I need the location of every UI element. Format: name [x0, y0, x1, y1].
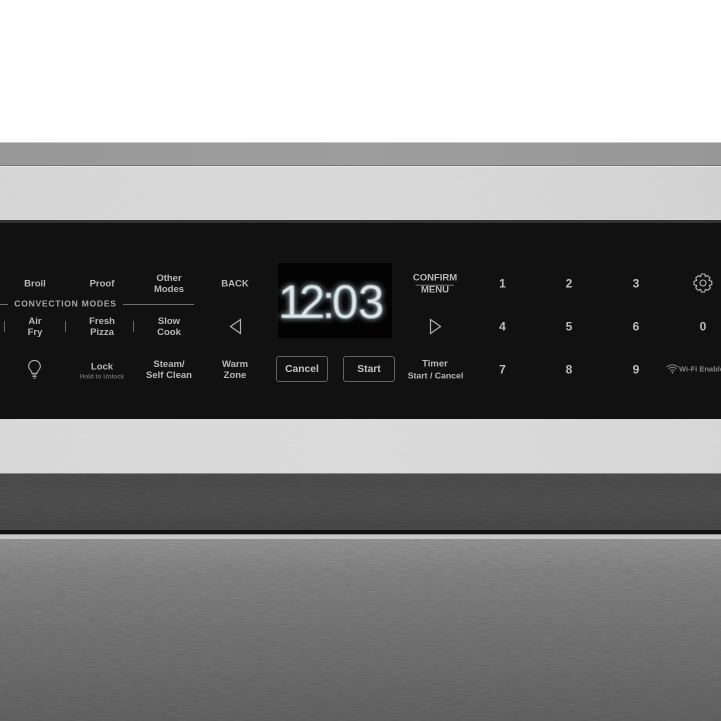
- dark steel strip: [0, 474, 721, 530]
- text: 7: [499, 362, 506, 376]
- label: Slow Cook: Cook: [157, 327, 181, 338]
- label: Steam / Self Clean: Self Clean: [146, 370, 192, 381]
- text: 8: [566, 362, 572, 376]
- label: Warm Zone: Zone: [224, 370, 246, 381]
- mode labels, first row: [24, 273, 249, 295]
- label: Proof: Proof: [90, 278, 114, 289]
- steel oven door: [0, 539, 721, 721]
- label: Other Modes: Other: [156, 273, 182, 284]
- display: clock: 12:03: [278, 275, 384, 328]
- icon: wifi: [666, 364, 678, 374]
- label: Air Fry: Fry: [28, 327, 42, 338]
- label: Slow Cook: [157, 316, 181, 338]
- icon: right arrow: [430, 318, 442, 334]
- door handle highlight: [0, 534, 721, 539]
- label: Broil: Broil: [24, 278, 46, 289]
- number keypad: [499, 276, 706, 376]
- icon: left arrow: [230, 318, 242, 334]
- mode labels, second row: [4, 316, 181, 338]
- button: Start: Start: [357, 364, 381, 375]
- label: Slow Cook: Slow: [158, 316, 180, 327]
- label: Fresh Pizza: Pizza: [90, 327, 114, 338]
- label: Warm Zone: Warm: [222, 359, 248, 370]
- display: clock: [278, 263, 392, 338]
- text: 3: [633, 276, 639, 290]
- door gap: [0, 530, 721, 534]
- text: 0: [700, 320, 706, 334]
- display: clock: 12:03: [278, 275, 384, 328]
- text: 2: [566, 276, 572, 290]
- label: Hold to Unlock: Hold to Unlock: [80, 373, 124, 380]
- label: Other Modes: [154, 273, 184, 295]
- label: Warm Zone: [222, 359, 248, 381]
- button: Cancel: [276, 356, 328, 382]
- lower brushed steel band: [0, 419, 721, 474]
- button: Cancel: Cancel: [285, 364, 319, 375]
- label: Other Modes: Modes: [154, 284, 184, 295]
- text: 9: [633, 362, 639, 376]
- upper brushed steel band: [0, 166, 721, 221]
- text: 1: [499, 276, 506, 290]
- label: Back: BACK: [221, 278, 249, 289]
- label: Lock: Lock: [91, 361, 113, 372]
- label: Air Fry: Air: [28, 316, 42, 327]
- label: Confirm / Menu: CONFIRM MENU: [413, 272, 457, 295]
- label: Air Fry: [28, 316, 42, 338]
- black control panel: [0, 220, 721, 419]
- top trim strip: [0, 142, 721, 166]
- text: 4: [499, 320, 506, 334]
- text: 6: [633, 320, 639, 334]
- convection line right: [123, 304, 194, 305]
- label: Timer: Timer: [422, 359, 448, 370]
- button: Start: [343, 356, 395, 382]
- label: Steam / Self Clean: Steam/: [153, 359, 185, 370]
- label: Fresh Pizza: [89, 316, 115, 338]
- label: Steam / Self Clean: [146, 359, 192, 381]
- icon: light bulb: [28, 360, 41, 379]
- text: 5: [566, 320, 572, 334]
- label: Start / Cancel: Start / Cancel: [408, 370, 463, 380]
- icon: settings gear: [693, 274, 712, 292]
- label: Fresh Pizza: Fresh: [89, 316, 115, 327]
- convection modes heading: CONVECTION MODES: [14, 299, 117, 309]
- convection line left: [0, 304, 8, 305]
